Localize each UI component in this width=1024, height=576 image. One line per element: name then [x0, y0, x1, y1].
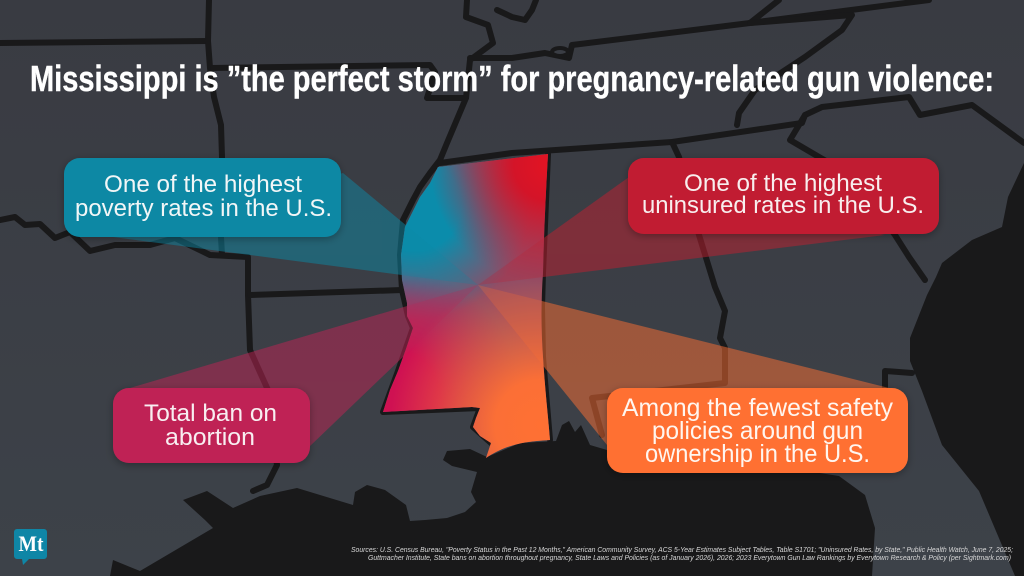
callout: gun safety: [607, 388, 908, 473]
sources: Guttmacher Institute, State bans on abortion throughout pregnancy, State Laws and Policies (as of January 2026), 2026; 2023 Everytown Gun Law Rankings by Everytown Research & Policy (per Sightmark.com): [368, 553, 1011, 562]
ray: gun safety: [478, 285, 889, 445]
callout: gun safety: policies around gun: [652, 417, 863, 445]
callout: abortion: [113, 388, 310, 463]
Mississippi gradient shape: [383, 154, 550, 458]
gulf of mexico: [110, 421, 875, 576]
callout: uninsured: One of the highest: [684, 170, 882, 197]
ray: abortion: [130, 285, 478, 448]
callout: poverty: One of the highest: [104, 171, 302, 198]
atlantic ocean: [910, 163, 1024, 576]
logo: Mt: [18, 531, 44, 556]
callout: abortion: abortion: [165, 424, 255, 451]
ray: uninsured: [478, 177, 885, 285]
callout: gun safety: ownership in the U.S.: [645, 440, 870, 468]
callout: uninsured: [628, 158, 939, 234]
callout: poverty: [64, 158, 341, 237]
callout: abortion: Total ban on: [144, 400, 277, 427]
callout: uninsured: uninsured rates in the U.S.: [642, 192, 924, 219]
logo: [14, 529, 47, 565]
light rays: [113, 173, 889, 448]
callout: poverty: poverty rates in the U.S.: [75, 195, 332, 222]
sources: [351, 545, 1013, 562]
ray: poverty: [113, 173, 478, 285]
callout: gun safety: Among the fewest safety: [622, 394, 893, 422]
